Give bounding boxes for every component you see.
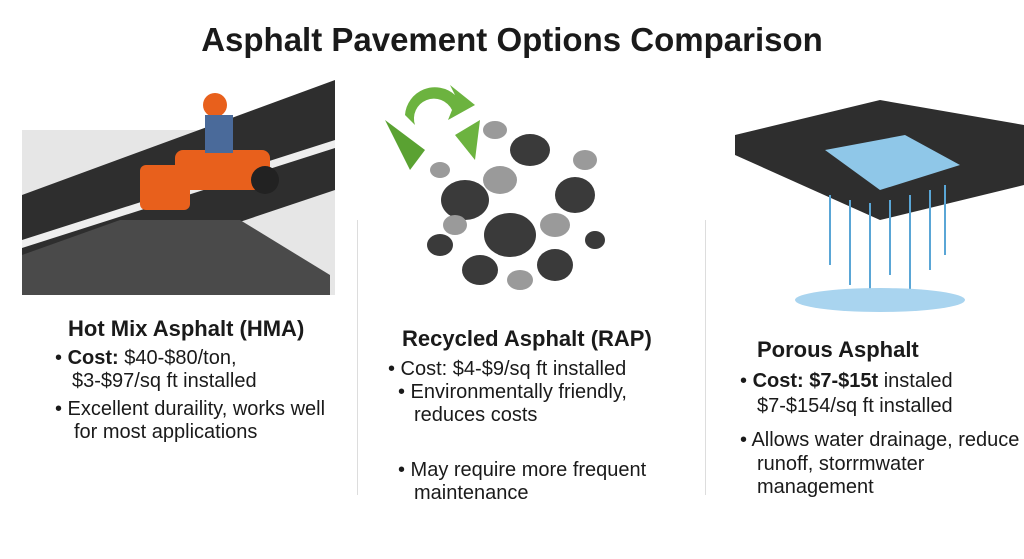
illustration: hot mix paving [22,80,335,295]
text: Porous Asphalt [757,337,919,362]
text: maintenance [414,482,529,504]
text: • Cost: $40-$80/ton, [55,347,237,369]
text: $3-$97/sq ft installed [72,370,257,392]
text: • May require more frequent [398,459,646,481]
panel: HMA [55,316,325,443]
panel: porous [740,337,1019,498]
text: for most applications [74,421,257,443]
text: • Cost: $7-$15t instaled [740,370,953,392]
text: • Cost: $4-$9/sq ft installed [388,358,626,380]
text: runoff, storrmwater [757,453,924,475]
text: Recycled Asphalt (RAP) [402,326,652,351]
text: $7-$154/sq ft installed [757,395,953,417]
illustration: recycled aggregate [385,85,605,290]
text: • Excellent duraility, works well [55,398,325,420]
text: Hot Mix Asphalt (HMA) [68,316,304,341]
text: • Allows water drainage, reduce [740,429,1019,451]
text: management [757,476,874,498]
text: reduces costs [414,404,537,426]
illustration: porous asphalt [735,100,1024,312]
panel: RAP [388,326,652,504]
title: Asphalt Pavement Options Comparison [201,21,823,58]
text: • Environmentally friendly, [398,381,627,403]
